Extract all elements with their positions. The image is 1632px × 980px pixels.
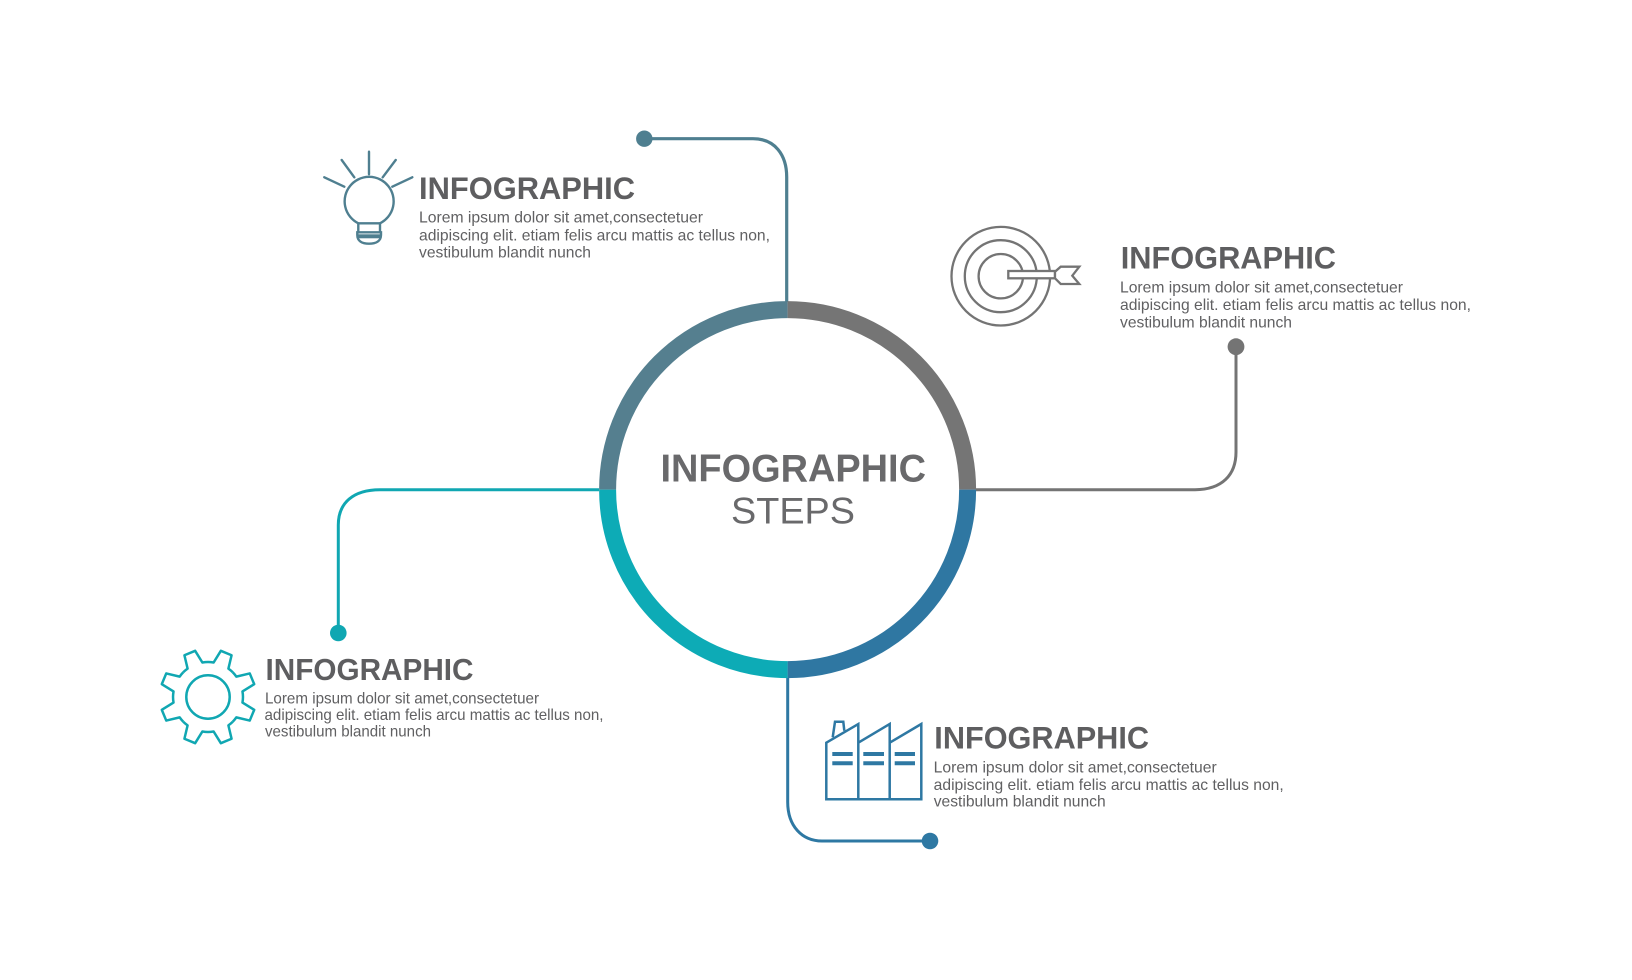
panel: step 3 gear <box>159 490 604 746</box>
text block: step 2: vestibulum blandit nunch <box>1120 314 1292 331</box>
icon: factory <box>826 722 921 799</box>
icon: target with arrow <box>952 227 1079 326</box>
panel: step 1 lightbulb <box>324 130 787 302</box>
text block: step 2: adipiscing elit. etiam felis arcu mattis ac tellus non, <box>1120 297 1471 314</box>
connector: step 3 <box>330 490 599 641</box>
center title: INFOGRAPHIC <box>660 447 926 490</box>
center title <box>660 447 926 531</box>
connector: step 2 <box>976 338 1244 490</box>
heading: step 3: INFOGRAPHIC <box>266 653 474 687</box>
connector: step 4 <box>788 678 938 849</box>
center title: STEPS <box>731 489 855 531</box>
panel: step 4 factory <box>788 678 1284 849</box>
text block: step 1: Lorem ipsum dolor sit amet,consectetuer <box>419 209 703 226</box>
icon: gear <box>159 648 257 746</box>
heading: step 4: INFOGRAPHIC <box>934 719 1149 755</box>
text block: step 3: adipiscing elit. etiam felis arcu mattis ac tellus non, <box>264 707 604 724</box>
text block: step 4: Lorem ipsum dolor sit amet,consectetuer <box>934 760 1217 777</box>
text block: step 1: vestibulum blandit nunch <box>419 244 591 261</box>
text block: step 4 <box>934 760 1284 811</box>
heading: step 1: INFOGRAPHIC <box>419 170 635 206</box>
text block: step 1 <box>419 209 770 261</box>
text block: step 3: Lorem ipsum dolor sit amet,consectetuer <box>265 690 539 707</box>
text block: step 4: adipiscing elit. etiam felis arcu mattis ac tellus non, <box>934 777 1284 794</box>
text block: step 4: vestibulum blandit nunch <box>934 794 1106 811</box>
text block: step 3 <box>264 690 604 740</box>
text block: step 1: adipiscing elit. etiam felis arcu mattis ac tellus non, <box>419 227 770 244</box>
connector: step 1 <box>636 130 787 302</box>
text block: step 2: Lorem ipsum dolor sit amet,consectetuer <box>1120 279 1403 296</box>
text block: step 3: vestibulum blandit nunch <box>265 724 431 740</box>
heading: step 2: INFOGRAPHIC <box>1121 239 1336 275</box>
central ring <box>608 310 968 670</box>
icon: lightbulb <box>324 152 412 244</box>
panel: step 2 target <box>952 227 1471 490</box>
text block: step 2 <box>1120 279 1471 331</box>
